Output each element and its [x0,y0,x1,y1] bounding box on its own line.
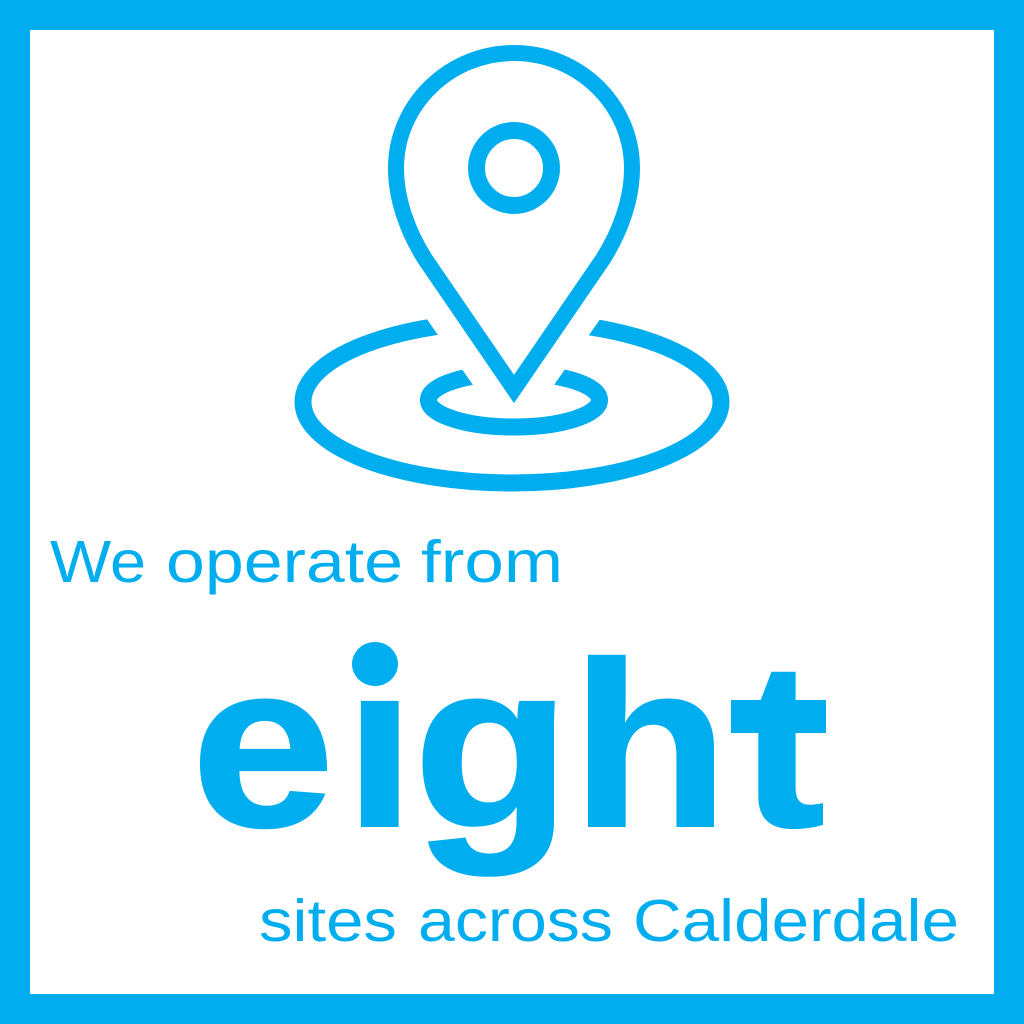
i dot cover [345,636,405,692]
text: sites across Calderdale: across [418,888,613,954]
icon: location pin on target rings [303,53,721,483]
text: we operate from: operate [166,529,403,595]
text: we operate from: from [421,529,563,595]
gap in rings behind pin [417,305,610,385]
pin centre circle [476,130,552,206]
text: sites across Calderdale: Calderdale [633,888,959,954]
t crossbar [731,700,826,733]
inner ring [428,373,600,427]
i round dot [352,642,398,686]
headline: eight: eight [191,614,825,876]
text: we operate from: We [50,529,146,595]
text: sites across Calderdale: sites [259,888,397,954]
outer ring [303,321,721,483]
pin outline [396,53,632,389]
